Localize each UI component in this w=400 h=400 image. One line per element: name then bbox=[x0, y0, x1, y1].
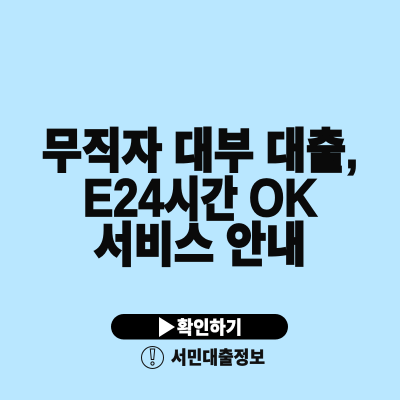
brand name: 서민대출정보 bbox=[171, 344, 265, 370]
icon: play triangle bbox=[159, 317, 175, 337]
icon: exclamation circle bbox=[142, 346, 164, 368]
title bbox=[42, 124, 358, 272]
title: E24시간 OK bbox=[83, 169, 317, 228]
brand logo bbox=[142, 344, 265, 370]
title: 서비스 안내 bbox=[94, 218, 306, 272]
button label: 확인하기 bbox=[177, 314, 242, 340]
title: 무직자 대부 대출, bbox=[42, 124, 358, 178]
button: 확인하기 bbox=[111, 314, 288, 340]
